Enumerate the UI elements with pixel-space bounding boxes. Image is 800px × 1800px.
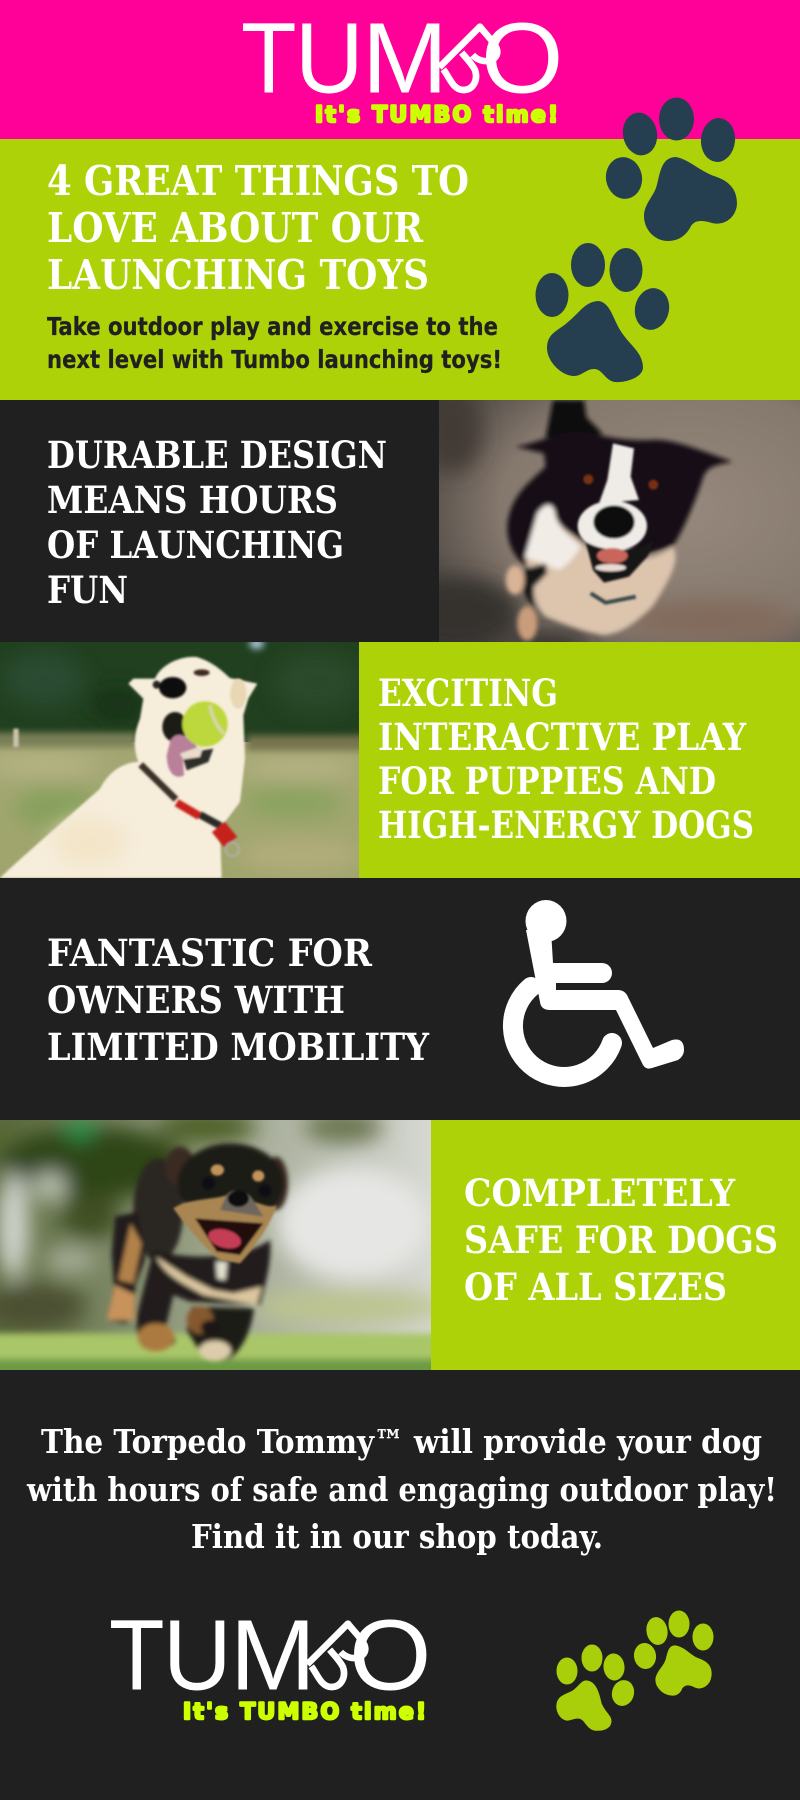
panel: safe for all sizes bbox=[431, 1120, 800, 1370]
heading: limited mobility: LIMITED MOBILITY bbox=[47, 1025, 430, 1069]
text: call to action: The Torpedo Tommy™ will provide your dog bbox=[41, 1422, 762, 1461]
panel: footer bbox=[0, 1370, 800, 1800]
heading: intro title bbox=[47, 157, 469, 299]
heading: interactive play: FOR PUPPIES AND bbox=[378, 759, 716, 803]
logo: Tumbo footer: O bbox=[349, 1599, 431, 1711]
heading: durable design: FUN bbox=[47, 568, 128, 612]
text: intro subtitle: next level with Tumbo launching toys! bbox=[47, 345, 502, 374]
heading: safe for all sizes: OF ALL SIZES bbox=[464, 1265, 727, 1309]
icon: wheelchair bbox=[513, 900, 684, 1077]
photo: small puppy running bbox=[0, 1120, 431, 1370]
logo: Tumbo top: U bbox=[295, 2, 364, 114]
logo: Tumbo footer: M bbox=[230, 1599, 316, 1711]
heading: interactive play bbox=[378, 671, 754, 847]
text: call to action: with hours of safe and engaging outdoor play! bbox=[26, 1470, 777, 1509]
heading: limited mobility bbox=[47, 931, 430, 1069]
logo: Tumbo footer: It's TUMBO time! bbox=[183, 1700, 426, 1725]
icon: navy paw lower bbox=[536, 243, 673, 382]
panel: durable design bbox=[0, 400, 439, 642]
panel: intro bbox=[0, 139, 800, 400]
heading: safe for all sizes: SAFE FOR DOGS bbox=[464, 1218, 778, 1262]
icon: green paw left bbox=[557, 1645, 636, 1730]
panel: limited mobility bbox=[0, 878, 800, 1120]
text: call to action bbox=[26, 1422, 777, 1556]
logo: Tumbo footer: T bbox=[109, 1600, 165, 1711]
logo: Tumbo top bbox=[241, 2, 563, 128]
heading: intro title: LOVE ABOUT OUR bbox=[47, 204, 423, 252]
panel: header banner bbox=[0, 0, 800, 139]
heading: limited mobility: OWNERS WITH bbox=[47, 978, 345, 1022]
logo: Tumbo top: M bbox=[362, 2, 448, 114]
text: intro subtitle: Take outdoor play and exercise to the bbox=[47, 312, 498, 341]
photo: border collie looking up bbox=[439, 400, 800, 642]
icon: navy paw upper bbox=[603, 98, 737, 241]
logo: Tumbo top: It's TUMBO time! bbox=[315, 103, 558, 128]
heading: safe for all sizes: COMPLETELY bbox=[464, 1171, 736, 1215]
heading: interactive play: INTERACTIVE PLAY bbox=[378, 715, 747, 759]
text: call to action: Find it in our shop today. bbox=[191, 1517, 603, 1556]
text: intro subtitle bbox=[47, 312, 502, 374]
heading: interactive play: HIGH-ENERGY DOGS bbox=[378, 803, 754, 847]
heading: safe for all sizes bbox=[464, 1171, 778, 1309]
logo: Tumbo footer bbox=[109, 1599, 431, 1725]
heading: intro title: LAUNCHING TOYS bbox=[47, 251, 429, 299]
icon: green paw right bbox=[633, 1611, 713, 1695]
heading: intro title: 4 GREAT THINGS TO bbox=[47, 157, 469, 205]
photo: white dog with tennis ball bbox=[0, 642, 359, 878]
heading: interactive play: EXCITING bbox=[378, 671, 558, 715]
heading: durable design: OF LAUNCHING bbox=[47, 523, 344, 567]
panel: interactive play bbox=[359, 642, 800, 878]
heading: durable design: DURABLE DESIGN bbox=[47, 433, 387, 477]
heading: limited mobility: FANTASTIC FOR bbox=[47, 931, 372, 975]
heading: durable design bbox=[47, 433, 387, 612]
heading: durable design: MEANS HOURS bbox=[47, 478, 338, 522]
logo: Tumbo top: T bbox=[241, 3, 297, 114]
logo: Tumbo footer: U bbox=[163, 1599, 232, 1711]
logo: Tumbo top: O bbox=[481, 2, 563, 114]
